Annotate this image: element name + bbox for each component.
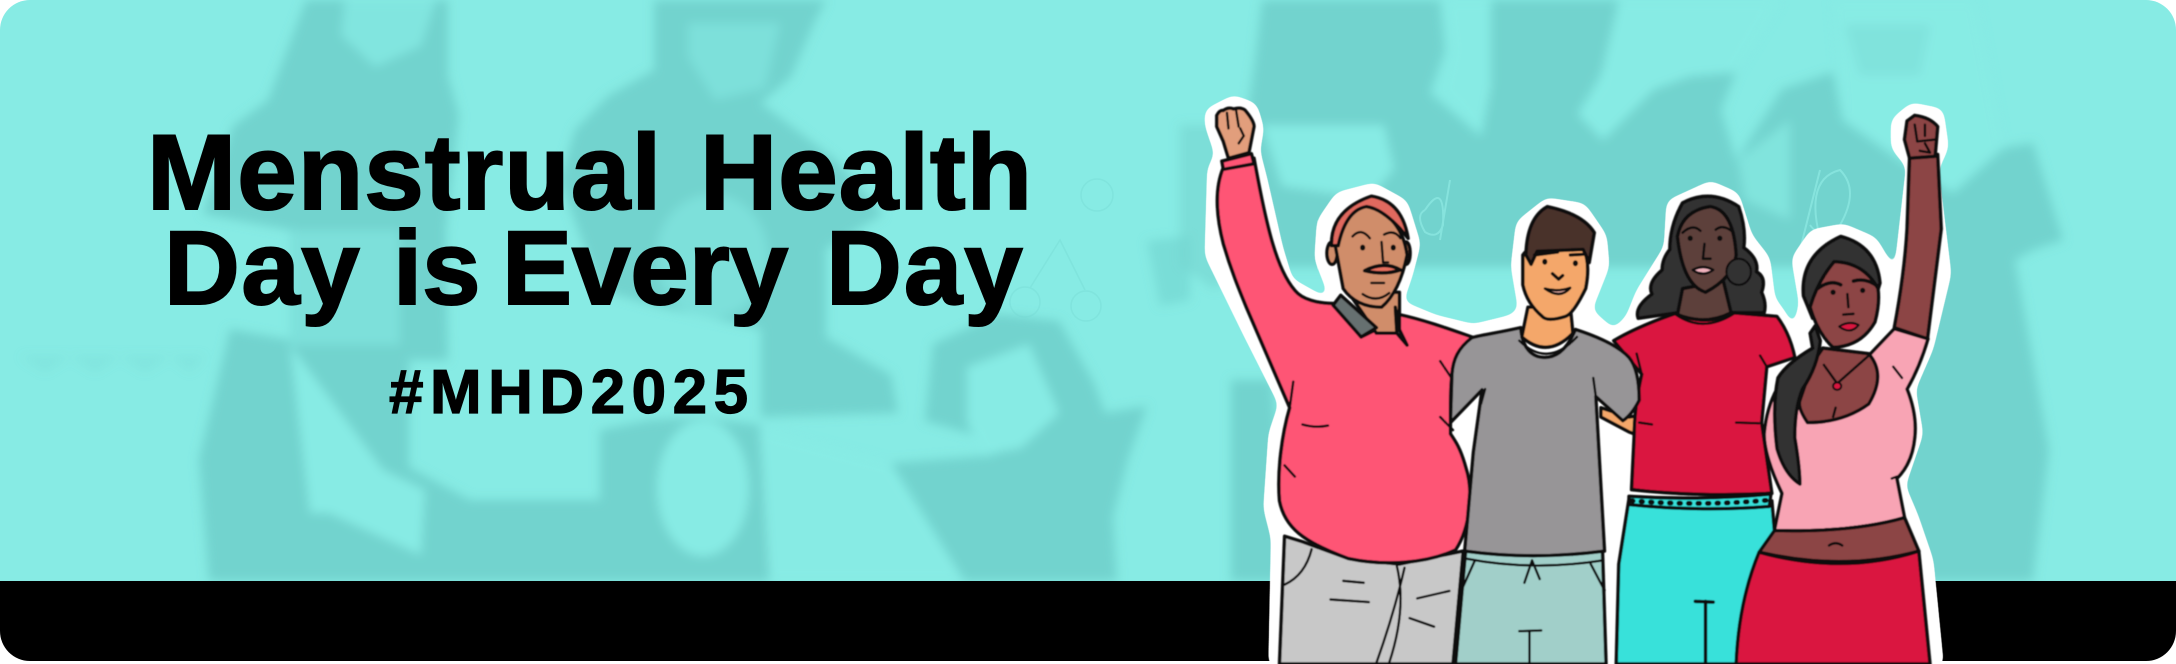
person 2 arm behind xyxy=(1601,408,1644,438)
person 4 raised arm xyxy=(1894,115,1941,339)
person 3 neck and face xyxy=(1677,207,1751,320)
person 4 midriff xyxy=(1759,518,1919,562)
title line 2: Every xyxy=(502,210,817,327)
title line 2: is xyxy=(393,210,510,327)
title line 1: Health xyxy=(700,112,1033,232)
person 2 grey t-shirt xyxy=(1450,328,1639,556)
person 1 head and hair xyxy=(1327,196,1410,307)
illustration: four people with raised fists xyxy=(1208,99,1948,664)
person 1 pink sweater xyxy=(1217,154,1472,563)
people artwork xyxy=(1217,108,1941,664)
person 4 pink top xyxy=(1764,329,1928,531)
person 4 long hair xyxy=(1775,326,1820,484)
person 1 neck and collar xyxy=(1333,292,1407,345)
photo shirt lettering xyxy=(1419,169,1851,244)
title line 1: Menstrual xyxy=(147,112,693,232)
title line 2: Day xyxy=(826,210,1025,327)
faint toy outlines in photo xyxy=(1010,179,1113,321)
person 3 red shirt xyxy=(1614,313,1795,509)
title xyxy=(147,112,1033,327)
person 2 neck and head xyxy=(1522,207,1594,347)
person 4 head and hair xyxy=(1803,236,1880,347)
person 4 red skirt xyxy=(1736,551,1930,664)
white sticker outline xyxy=(1208,99,1948,664)
person 1 trousers xyxy=(1279,536,1463,664)
person 2 shorts xyxy=(1456,550,1606,664)
hashtag: #MHD2025 xyxy=(389,358,755,427)
black footer bar xyxy=(0,581,2176,664)
person 3 trousers xyxy=(1616,499,1774,664)
person 1 fist xyxy=(1217,108,1254,158)
person 3 hair xyxy=(1637,196,1765,318)
title line 2: Day xyxy=(164,210,392,327)
light faces and pale shapes xyxy=(290,0,1790,558)
person 4 chest and necklace xyxy=(1799,348,1878,423)
